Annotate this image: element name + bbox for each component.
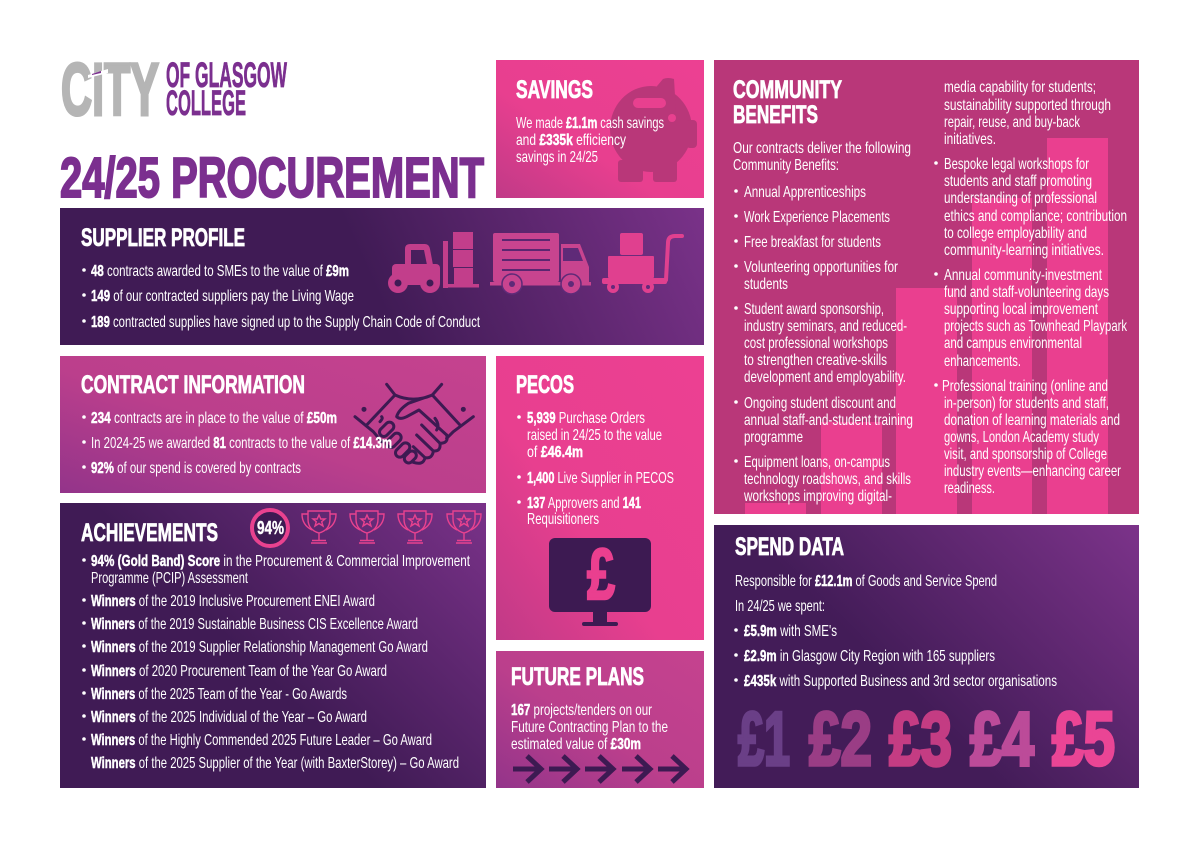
list: benefits right column: visit, and sponsorship of College	[944, 446, 1107, 463]
list: supplier facts: 149 of our contracted suppliers pay the Living Wage	[91, 288, 354, 305]
list: benefits left column: Free breakfast for students	[744, 234, 881, 251]
list: spend figures: £435k with Supported Business and 3rd sector organisations	[744, 673, 1057, 690]
graphic: large pound figures: £1	[738, 697, 790, 782]
icon: handshake	[355, 384, 473, 465]
icon: 94 percent ring	[252, 510, 288, 546]
list: PECOS facts	[517, 410, 674, 528]
list: spend figures: £5.9m with SME's	[744, 623, 837, 640]
list: benefits left column: Annual Apprenticeships	[744, 184, 866, 201]
heading: savings: SAVINGS	[516, 76, 593, 104]
list: awards: Winners of the 2025 Team of the Year - Go Awards	[91, 686, 347, 703]
list: benefits right column: initiatives.	[944, 131, 996, 148]
list: benefits right column: ethics and compliance; contribution	[944, 208, 1127, 225]
list: contract facts: In 2024-25 we awarded 81 contracts to the value of £14.3m	[91, 435, 392, 452]
list: benefits right column: and campus environmental	[944, 335, 1082, 352]
text: OF GLASGOW	[166, 56, 287, 95]
list: PECOS facts: 137 Approvers and 141	[527, 495, 641, 512]
list: PECOS facts: Requisitioners	[527, 511, 599, 528]
icon: delivery truck	[490, 233, 591, 294]
list: contract facts: 92% of our spend is covered by contracts	[91, 460, 301, 477]
list: spend figures: £2.9m in Glasgow City Region with 165 suppliers	[744, 648, 995, 665]
list: benefits right column: understanding of professional	[944, 190, 1097, 207]
list: awards: Winners of the 2019 Inclusive Procurement ENEI Award	[91, 593, 375, 610]
list: benefits right column: gowns, London Academy study	[944, 429, 1099, 446]
list: spend figures: In 24/25 we spent:	[735, 598, 825, 615]
list: benefits right column: Professional training (online and	[942, 378, 1108, 395]
text: savings figures: and £335k efficiency	[516, 132, 626, 149]
list: benefits right column: community-learning initiatives.	[944, 242, 1104, 259]
list: awards: Winners of the Highly Commended 2025 Future Leader – Go Award	[91, 732, 432, 749]
list: benefits left column: industry seminars, and reduced-	[744, 318, 907, 335]
list: benefits left column: Student award sponsorship,	[744, 301, 884, 318]
panel: future plans	[496, 651, 704, 788]
text: savings figures	[516, 115, 664, 166]
list: benefits right column: donation of learning materials and	[944, 412, 1120, 429]
list: awards: Winners of the 2019 Supplier Relationship Management Go Award	[91, 639, 428, 656]
list: spend figures: Responsible for £12.1m of Goods and Service Spend	[735, 573, 997, 590]
icon: piggy bank	[610, 78, 697, 182]
heading: future plans: FUTURE PLANS	[511, 663, 644, 691]
text: future plans: Future Contracting Plan to the	[511, 719, 668, 736]
list: benefits right column	[934, 79, 1128, 497]
list: benefits left column: students	[744, 276, 788, 293]
graphic: large pound figures: £3	[889, 697, 952, 782]
icon: monitor with pound sign	[549, 535, 651, 626]
list: benefits left column: to strengthen creative-skills	[744, 352, 887, 369]
graphic: large pound figures	[738, 697, 1115, 782]
list: awards: Winners of the 2019 Sustainable Business CIS Excellence Award	[91, 616, 418, 633]
text: future plans: 167 projects/tenders on our	[511, 702, 652, 719]
list: benefits right column: to college employability and	[944, 225, 1087, 242]
list: benefits left column: Equipment loans, on-campus	[744, 454, 890, 471]
list: benefits left column: Community Benefits:	[733, 157, 839, 174]
title: 24/25 PROCUREMENT	[60, 146, 484, 210]
list: PECOS facts: raised in 24/25 to the value	[527, 427, 662, 444]
text: future plans	[511, 702, 668, 753]
icon: trophies	[302, 511, 481, 543]
heading: community benefits	[733, 76, 842, 129]
graphic: large pound figures: £2	[809, 697, 872, 782]
logo: CITY	[61, 48, 159, 131]
list: benefits right column: enhancements.	[944, 353, 1021, 370]
graphic: large pound figures: £5	[1052, 697, 1115, 782]
list: benefits right column: media capability for students;	[944, 79, 1096, 96]
icon: forklift	[388, 232, 479, 293]
logo: COLLEGE	[166, 84, 246, 123]
list: PECOS facts: of £46.4m	[527, 444, 583, 461]
list: benefits left column: Volunteering opportunities for	[744, 259, 898, 276]
list: spend figures	[734, 573, 1057, 690]
text: savings figures: We made £1.1m cash savings	[516, 115, 664, 132]
list: supplier facts: 48 contracts awarded to SMEs to the value of £9m	[91, 263, 349, 280]
list: benefits right column: industry events—enhancing career	[944, 463, 1121, 480]
list: benefits right column: projects such as Townhead Playpark	[944, 318, 1128, 335]
list: PECOS facts: 5,939 Purchase Orders	[527, 410, 645, 427]
list: benefits left column	[733, 140, 913, 505]
panel: savings	[496, 60, 704, 198]
list: benefits right column: sustainability supported through	[944, 97, 1111, 114]
chart: background bars	[745, 138, 1108, 514]
list: benefits left column: Ongoing student discount and	[744, 395, 896, 412]
graphic: large pound figures: £4	[970, 697, 1034, 782]
list: benefits left column: cost professional workshops	[744, 335, 888, 352]
text: savings figures: savings in 24/25	[516, 149, 598, 166]
list: benefits left column: Our contracts deliver the following	[733, 140, 911, 157]
list: benefits right column: supporting local improvement	[944, 301, 1098, 318]
list: benefits left column: workshops improving digital-	[743, 488, 892, 505]
list: benefits left column: annual staff-and-student training	[744, 412, 913, 429]
list: benefits left column: development and employability.	[744, 369, 906, 386]
list: benefits right column: Bespoke legal workshops for	[944, 156, 1089, 173]
icon: 94 percent ring: 94%	[257, 518, 284, 538]
panel: contract information	[60, 356, 486, 493]
list: benefits left column: programme	[744, 429, 803, 446]
text: future plans: estimated value of £30m	[511, 736, 641, 753]
list: benefits right column: readiness.	[944, 480, 995, 497]
list: awards: Programme (PCIP) Assessment	[91, 570, 248, 587]
panel: PECOS	[496, 356, 704, 640]
list: benefits right column: repair, reuse, and buy-back	[944, 114, 1081, 131]
list: benefits left column: Work Experience Placements	[744, 209, 890, 226]
list: awards: Winners of the 2025 Individual of the Year – Go Award	[91, 709, 367, 726]
heading: achievements: ACHIEVEMENTS	[81, 519, 218, 547]
panel: achievements	[60, 503, 486, 788]
list: awards: Winners of 2020 Procurement Team of the Year Go Award	[91, 663, 387, 680]
list: benefits right column: Annual community-investment	[944, 267, 1102, 284]
list: contract facts	[82, 410, 392, 477]
heading: contract information: CONTRACT INFORMATION	[81, 371, 305, 399]
list: benefits right column: fund and staff-volunteering days	[944, 284, 1109, 301]
list: awards	[82, 553, 470, 772]
icon: hand trolley	[602, 233, 682, 293]
heading: supplier profile: SUPPLIER PROFILE	[81, 224, 245, 252]
list: supplier facts	[82, 263, 480, 331]
list: benefits right column: in-person) for students and staff,	[944, 395, 1109, 412]
icon: monitor with pound sign: £	[587, 535, 615, 615]
panel: supplier profile	[60, 208, 704, 345]
heading: community benefits: BENEFITS	[733, 101, 818, 129]
heading: spend data: SPEND DATA	[735, 533, 844, 561]
list: supplier facts: 189 contracted supplies have signed up to the Supply Chain Code of Conduct	[91, 314, 480, 331]
heading: PECOS: PECOS	[516, 371, 574, 399]
panel: community benefits	[714, 60, 1139, 514]
list: benefits right column: students and staff promoting	[944, 173, 1092, 190]
list: awards: 94% (Gold Band) Score in the Procurement & Commercial Improvement	[91, 553, 470, 570]
list: contract facts: 234 contracts are in place to the value of £50m	[91, 410, 337, 427]
heading: community benefits: COMMUNITY	[733, 76, 842, 104]
list: awards: Winners of the 2025 Supplier of the Year (with BaxterStorey) – Go Award	[91, 755, 459, 772]
list: PECOS facts: 1,400 Live Supplier in PECOS	[527, 470, 674, 487]
list: benefits left column: technology roadshows, and skills	[744, 471, 911, 488]
icon: arrows	[513, 756, 686, 782]
panel: spend data	[714, 525, 1139, 788]
